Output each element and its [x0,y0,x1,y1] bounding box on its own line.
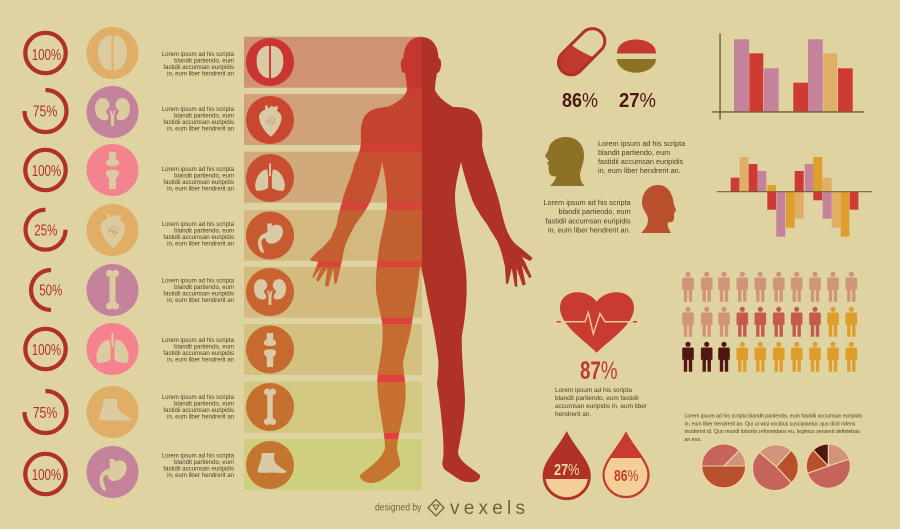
bar icon: stomach [246,212,294,260]
text: heart block: Lorem ipsum ad his scripta [555,387,632,394]
icon: bone [86,264,138,316]
drop: 27% [542,431,591,500]
text block 1: blandit partiendo, eum [174,58,234,64]
logo: designed by vexels: vexels [450,498,525,519]
bar icon: lungs [246,154,294,202]
pie chart 3 [806,444,850,488]
bar organ icons [246,38,294,489]
text block 3: fastidii accumsan euripidis [163,180,234,186]
people row 3 [682,342,857,372]
round pill icon [617,40,656,73]
drop: 86%: 86% [614,468,638,485]
text block 1: Lorem ipsum ad his scripta [162,52,235,58]
icon: foot [86,386,138,438]
text block 4: blandit partiendo, eum [174,228,234,234]
text block 4: Lorem ipsum ad his scripta [162,222,235,228]
text block 3: blandit partiendo, eum [174,174,234,180]
bar 6 [244,324,422,375]
bar icon: knee joint [246,326,294,374]
text block 5: Lorem ipsum ad his scripta [162,278,235,284]
icon: lungs [86,323,138,375]
ring: 75% [24,90,66,132]
bar icon: kidneys [246,268,294,316]
text: head block 2: fastidii accumsan euripidis [546,216,631,225]
text: head block 1: Lorem ipsum ad his scripta [598,139,686,148]
stat: 86%: 86% [562,90,598,112]
icon: kidneys [86,86,138,138]
drop: 86% [602,431,650,498]
organ icon circles column [86,27,138,498]
bar 5 [244,267,422,318]
text: head block 2: blandit partiendo, eum [558,207,631,216]
text block 5: in, eum liber hendrerit an [167,298,234,304]
text block 2: blandit partiendo, eum [174,114,234,120]
text block 2: fastidii accumsan euripidis [163,120,234,126]
bar 4 [244,210,422,261]
bar 3 [244,152,422,203]
human body silhouette [310,37,533,483]
people row 2 [682,307,857,337]
ring: 75%: 75% [33,104,57,121]
text: head block 2: in, eum liber hendrerit an. [548,226,631,235]
ring: 25% [26,210,66,250]
text: heart block: accumsan euripidis in, eum liber [555,403,648,410]
text: pie block: Lorem ipsum ad his scripta blandit partiendo, eum fastidii accumsan euripidis [684,414,863,420]
text block 7: fastidii accumsan euripidis [163,408,234,414]
text block 8: fastidii accumsan euripidis [163,466,234,472]
ring: 100% [25,454,66,494]
ring: 50% [31,270,62,310]
bar chart: positive and negative [717,157,872,237]
text: pie block: an eos. [684,437,702,443]
bar 7 [244,382,422,433]
text block 6: fastidii accumsan euripidis [163,351,234,357]
text: pie block: inciderint id. Quo mundi lobortis reformidans eu, legimus senserit definiebas [684,429,860,435]
text block 5: fastidii accumsan euripidis [163,292,234,298]
text: head block 1: fastidii accumsan euripidis [598,157,684,166]
text block 4: in, eum liber hendrerit an [167,242,234,248]
text block 8: blandit partiendo, eum [174,460,234,466]
body part bars [244,37,422,490]
text block 2: Lorem ipsum ad his scripta [162,107,235,113]
text: head block 1: blandit partiendo, eum [598,148,670,157]
pie chart 1 [702,444,746,488]
ring: 100% [25,150,66,190]
pie chart 2 [753,445,798,491]
bar icon: brain [246,38,294,86]
text block 5: blandit partiendo, eum [174,285,234,291]
left text blocks [162,52,235,479]
text block 7: in, eum liber hendrerit an [167,414,234,420]
ring: 50%: 50% [39,282,62,299]
text: head block 2: Lorem ipsum ad his scripta [543,198,632,207]
text block 7: blandit partiendo, eum [174,402,234,408]
stat: 27%: 27% [619,90,656,112]
people row 1 [682,272,857,302]
stat: 87%: 87% [580,357,618,385]
text: head block 1: in, eum liber hendrerit an. [598,166,681,175]
ring: 75% [24,391,66,433]
text block 1: in, eum liber hendrerit an [167,72,234,78]
text block 8: Lorem ipsum ad his scripta [162,454,235,460]
ring: 100% [25,33,66,73]
bar 2 [244,94,422,145]
text block 4: fastidii accumsan euripidis [163,235,234,241]
logo: designed by vexels: designed by [375,502,422,514]
bar icon: bone [246,383,294,431]
text block 3: in, eum liber hendrerit an [167,186,234,192]
ring: 25%: 25% [34,222,57,239]
ring: 100%: 100% [32,467,61,484]
text block 8: in, eum liber hendrerit an [167,473,234,479]
text block 7: Lorem ipsum ad his scripta [162,395,235,401]
ring: 100%: 100% [32,342,61,359]
icon: heart with pulse [557,292,637,353]
icon: knee joint [86,144,138,196]
ring: 75%: 75% [33,405,57,422]
text block 6: blandit partiendo, eum [174,344,234,350]
text: heart block: blandit partiendo, eum fastidii [555,395,639,402]
bar icon: heart [246,96,294,144]
text: pie block: in, eum liber hendrerit an. Qui ut wisi vocibus suscipiantur, quo dicit ridens [684,421,856,427]
text block 6: in, eum liber hendrerit an [167,358,234,364]
ring: 100% [25,329,66,369]
icon: brain [86,27,138,79]
text block 6: Lorem ipsum ad his scripta [162,338,235,344]
ring: 100%: 100% [32,163,61,180]
bar 1 [244,37,422,88]
icon: stomach [86,446,138,498]
bar icon: foot [246,441,294,489]
people pictogram grid [682,272,857,372]
text block 3: Lorem ipsum ad his scripta [162,167,235,173]
logo: designed by vexels [375,498,525,519]
text block 2: in, eum liber hendrerit an [167,126,234,132]
percentage rings column [24,33,66,494]
icon: olive head [545,137,585,186]
ring: 100%: 100% [32,47,61,64]
icon: heart [86,204,138,256]
bar chart: positive [712,34,864,120]
capsule pill icon [557,27,606,76]
drop: 27%: 27% [554,462,580,479]
text block 1: fastidii accumsan euripidis [163,65,234,71]
text: heart block: hendrerit an. [555,411,591,418]
bar 8 [244,439,422,490]
icon: red head [641,185,676,233]
